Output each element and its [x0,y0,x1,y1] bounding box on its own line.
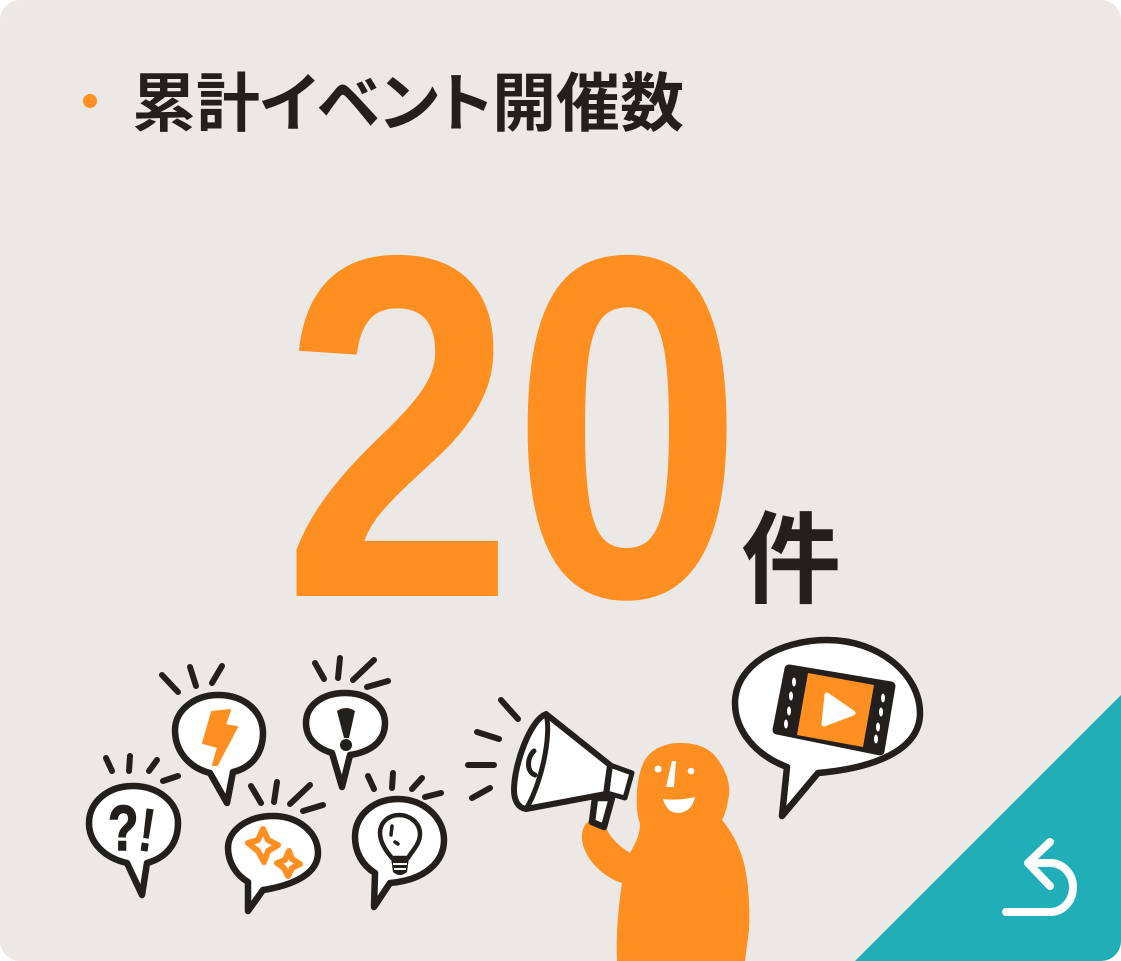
bubble: question and exclamation marks [89,756,178,895]
play icon [824,695,853,724]
illustration: speech bubbles [89,658,444,911]
megaphone [514,714,632,827]
big number and unit [282,154,841,700]
bubble: lightning [162,666,263,803]
bullet dot [83,94,97,108]
bubble: sparkles [228,782,323,911]
bubble: exclamation [306,658,388,787]
film frame [777,669,891,751]
title [83,68,684,140]
person [582,743,749,961]
bubble: question and exclamation marks: ? [108,793,138,864]
sound rays [468,700,518,798]
number 20: 20 [282,154,740,700]
film holes [784,678,885,744]
face [654,761,695,813]
bubble: question and exclamation marks: ! [134,794,160,865]
icon: return arrow [1006,842,1073,912]
video screen [797,673,874,747]
illustration: video speech bubble [735,640,920,816]
illustration: person with megaphone [468,700,749,961]
bubble: light bulb [355,773,444,907]
unit: 件 [741,505,841,617]
title text: 累計イベント開催数 [132,68,684,140]
back button corner [855,695,1121,961]
